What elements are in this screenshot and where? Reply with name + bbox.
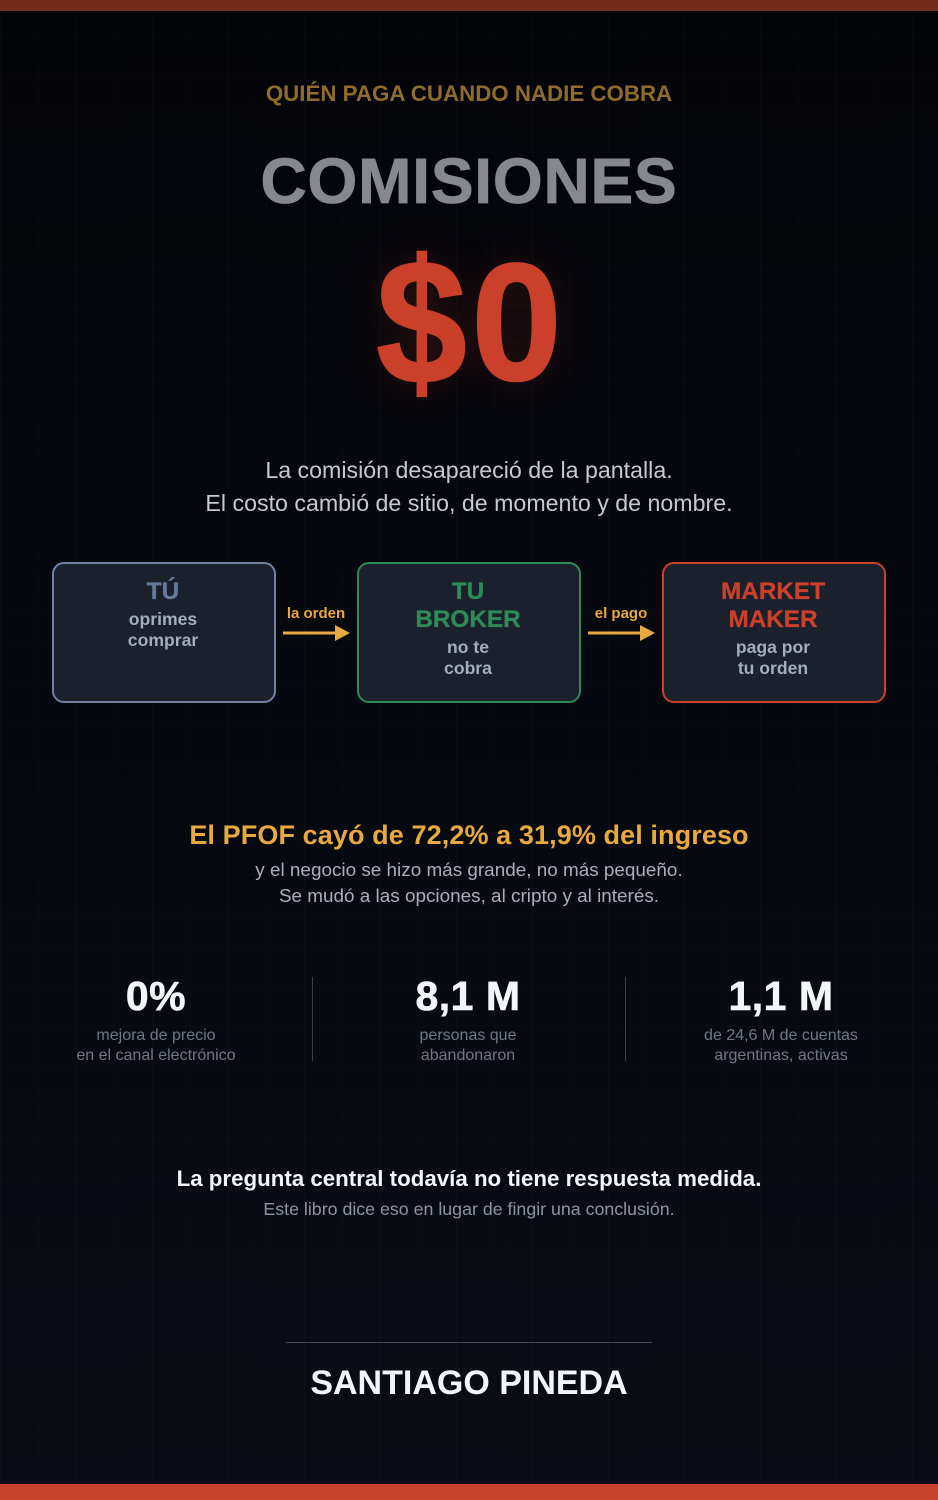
intro text: La comisión desapareció de la pantalla. bbox=[265, 457, 673, 483]
box: market maker: MAKER bbox=[728, 606, 818, 633]
box: tu broker: BROKER bbox=[415, 606, 521, 633]
box: tu broker: cobra bbox=[444, 658, 492, 678]
central note: Este libro dice eso en lugar de fingir una conclusión. bbox=[263, 1199, 675, 1219]
author: SANTIAGO PINEDA bbox=[310, 1364, 628, 1402]
title: comisiones: COMISIONES bbox=[261, 145, 677, 217]
stat: 8,1 M: abandonaron bbox=[421, 1046, 515, 1064]
intro text: El costo cambió de sitio, de momento y de nombre. bbox=[205, 490, 733, 516]
pfof heading: El PFOF cayó de 72,2% a 31,9% del ingreso bbox=[189, 820, 749, 850]
stat: 0%: 0% bbox=[126, 973, 186, 1019]
top bar bbox=[0, 0, 938, 11]
title: $0: $ bbox=[376, 224, 466, 421]
box: tú: comprar bbox=[128, 630, 198, 650]
box: market maker: MARKET bbox=[721, 578, 825, 605]
stat: 8,1 M: personas que bbox=[420, 1027, 516, 1044]
stat: 1,1 M: argentinas, activas bbox=[714, 1046, 848, 1064]
box: market maker: tu orden bbox=[738, 658, 808, 678]
stats row bbox=[76, 973, 858, 1064]
box: tú bbox=[52, 562, 276, 703]
box: tu broker: TU bbox=[452, 578, 484, 605]
stat: 1,1 M bbox=[704, 973, 858, 1064]
flow diagram bbox=[52, 562, 886, 703]
bottom bar bbox=[0, 1484, 938, 1500]
pfof text: y el negocio se hizo más grande, no más pequeño. bbox=[255, 860, 683, 881]
title: $0: 0 bbox=[472, 229, 562, 416]
stat: 8,1 M: 8,1 M bbox=[415, 973, 521, 1019]
stat: 1,1 M: 1,1 M bbox=[728, 973, 834, 1019]
stat: 8,1 M bbox=[415, 973, 521, 1064]
intro text bbox=[205, 457, 733, 516]
box: market maker: paga por bbox=[736, 637, 810, 657]
box: market maker bbox=[662, 562, 886, 703]
title: $0 bbox=[374, 224, 567, 421]
stat: 0%: mejora de precio bbox=[96, 1027, 216, 1044]
arrow: la orden: la orden bbox=[287, 605, 345, 622]
arrow: el pago: el pago bbox=[595, 605, 647, 622]
box: tú: TÚ bbox=[147, 578, 179, 605]
eyebrow heading: QUIÉN PAGA CUANDO NADIE COBRA bbox=[266, 81, 672, 106]
box: tú: oprimes bbox=[129, 609, 197, 629]
box: tu broker: no te bbox=[447, 637, 489, 657]
stat: 0%: en el canal electrónico bbox=[76, 1046, 236, 1064]
arrow: el pago bbox=[588, 605, 655, 641]
box: tu broker bbox=[357, 562, 581, 703]
pfof text: Se mudó a las opciones, al cripto y al interés. bbox=[279, 886, 659, 907]
arrow: la orden bbox=[283, 605, 350, 641]
stat: 1,1 M: de 24,6 M de cuentas bbox=[704, 1027, 858, 1044]
central question: La pregunta central todavía no tiene respuesta medida. bbox=[177, 1166, 761, 1191]
stat: 0% bbox=[76, 973, 236, 1064]
pfof text bbox=[255, 860, 683, 907]
